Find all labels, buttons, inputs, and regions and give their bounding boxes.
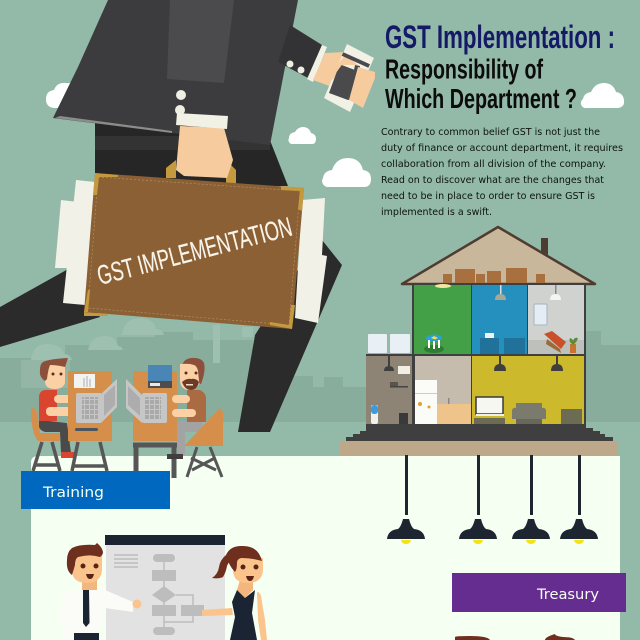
desk right [126,365,177,478]
attic boxes [443,268,545,284]
worker right [167,358,223,477]
shirt [60,590,133,640]
torso [187,390,206,422]
flowchart board [105,535,225,640]
intro text: need to be in place to order to ensure GST is [381,191,595,202]
room: kitchen [415,356,471,424]
intro text: Contrary to common belief GST is not just the [381,127,600,138]
treasury label [452,573,626,612]
intro text [381,127,623,218]
arm and phone [278,25,375,112]
ponytail [212,555,232,578]
briefcase label: GST IMPLEMENTATION [94,212,295,291]
intro text: collaboration from all division of the company. [381,159,606,170]
city skyline [0,318,640,422]
sleeve [278,25,322,78]
treasury figures hair [455,634,575,640]
fingers [349,67,375,108]
title: Responsibility of [385,54,543,84]
title [385,19,615,114]
head [45,363,65,389]
room: blue [472,285,527,354]
neck [237,580,253,598]
hand and cuff holding briefcase [166,113,236,184]
lamp 2 [459,455,497,544]
worker left [31,358,74,471]
briefcase [84,173,304,329]
papers behind briefcase [55,180,327,323]
desk left [68,371,117,471]
chair [184,408,223,446]
hanging lamps [387,455,598,544]
lamp 4 [560,455,598,544]
cloud: left [46,83,78,108]
trousers [0,120,342,432]
tie [83,590,90,627]
dress [230,590,257,640]
intro text: implemented is a swift. [381,207,492,218]
cloud: large middle [322,158,371,187]
house [340,227,618,455]
face [72,556,102,583]
phone [324,44,374,112]
intro text: Read on to discover what are the changes that [381,175,604,186]
room: grey [528,285,584,354]
chair [31,407,60,441]
roof [402,227,595,284]
house frame [412,283,586,425]
house steps [346,424,613,441]
presenter man [60,543,142,640]
white panel [31,456,620,640]
palm [313,52,352,87]
lamp 3 [512,455,550,544]
room: yellow living room [472,356,584,424]
cloud: title [581,83,624,108]
platform [340,441,618,455]
hair [67,543,103,575]
head [180,364,200,390]
presenter woman [202,546,267,640]
hair [226,546,262,572]
office workers [31,358,223,478]
cuff [307,45,327,82]
room: storage [366,334,412,424]
intro text: duty of finance or account department, it requires [381,143,623,154]
pants [177,421,203,455]
arms [202,608,233,616]
pants [39,420,71,453]
torso [39,390,57,421]
room: green [414,284,471,354]
training label [21,471,170,509]
lamp 1 [387,455,425,544]
training label: Training [42,485,104,501]
chimney [541,238,548,260]
face [233,558,263,583]
jacket [53,0,298,145]
treasury label: Treasury [536,587,599,603]
cloud: small middle [288,127,316,144]
